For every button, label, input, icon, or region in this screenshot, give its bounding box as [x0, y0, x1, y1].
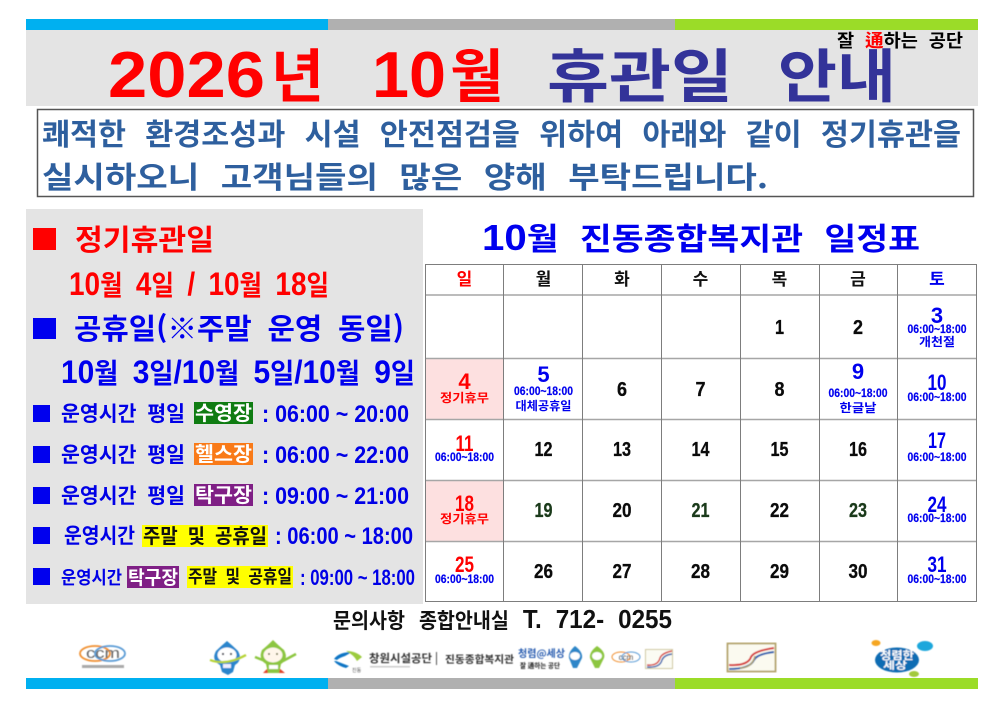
logo strip: combined organisation logos: 창원시설공단 [369, 650, 432, 666]
week 3: 11 [456, 431, 474, 456]
week 4: 23 [849, 500, 867, 522]
hours: table tennis weekends: 탁구장 [128, 563, 178, 590]
hours: fitness centre: 헬스장 [195, 438, 252, 467]
week 3 [435, 428, 967, 464]
hours: fitness centre: 운영시간 평일 [61, 439, 185, 469]
week 2: 7 [696, 379, 706, 401]
week 2: 06:00~18:00 [828, 386, 888, 400]
title: 10 [372, 38, 446, 111]
week 2: 10 [928, 370, 946, 395]
week 1: 06:00~18:00 [908, 322, 967, 336]
week 4: 24 [928, 492, 947, 517]
week 5 [435, 552, 967, 586]
notice box: 실시하오니 고객님들의 많은 양해 부탁드립니다. [42, 153, 768, 197]
public holiday dates: 10월 3일/10월 5일/10월 9일 [61, 354, 415, 390]
week 2: 06:00~18:00 [514, 384, 573, 398]
week 1: 개천절 [919, 333, 955, 350]
week 4: 정기휴무 [440, 510, 489, 527]
week 2: 06:00~18:00 [908, 390, 967, 404]
week 3: 17 [928, 428, 946, 453]
icon: green mascot [255, 640, 296, 673]
logo strip: combined organisation logos: 청렴@세상 [518, 645, 565, 660]
weekday headers: 수 [693, 265, 708, 290]
week 2: 4 [458, 369, 471, 394]
hours: swimming pool: 운영시간 평일 [61, 398, 185, 428]
hours: swimming pool [33, 397, 409, 428]
week 3: 14 [692, 439, 710, 461]
public holiday heading: 공휴일(※주말 운영 동일) [74, 306, 404, 348]
weekday headers: 월 [536, 265, 551, 290]
logo strip: combined organisation logos [334, 645, 672, 674]
week 2: 6 [617, 379, 627, 401]
weekday headers: 토 [929, 265, 945, 290]
weekday headers: 화 [614, 265, 630, 290]
week 5: 28 [691, 561, 710, 583]
week 2: 8 [774, 379, 784, 401]
logo strip: combined organisation logos: ccm [619, 653, 634, 662]
calendar table [425, 264, 977, 602]
week 5: 26 [534, 561, 553, 583]
logo: clean world blob: 세상 [883, 657, 907, 672]
week 4: 19 [534, 500, 552, 522]
logo strip: combined organisation logos: 진동종합복지관 [445, 651, 514, 666]
week 5: 25 [455, 552, 474, 577]
regular closure heading: 정기휴관일 [75, 217, 214, 259]
hours: table tennis: 운영시간 평일 [61, 480, 185, 510]
regular closure dates: 10월 4일 / 10월 18일 [69, 266, 329, 302]
title: 월 [450, 30, 504, 114]
hours: table tennis weekends: 주말 및 공휴일 [188, 563, 292, 589]
week 5: 06:00~18:00 [908, 572, 967, 586]
week 3: 15 [770, 439, 788, 461]
hours: table tennis: 탁구장 [195, 479, 252, 508]
week 1 [775, 303, 967, 350]
logo strip: combined organisation logos: 잘 通하는 공단 [520, 661, 561, 671]
emblem: certification mark [728, 644, 776, 672]
hours: table tennis: : 09:00 ~ 21:00 [262, 483, 409, 510]
week 3: 06:00~18:00 [908, 450, 967, 464]
weekday headers [457, 265, 945, 290]
week 4: 18 [455, 491, 474, 516]
hours: table tennis weekends: : 09:00 ~ 18:00 [300, 565, 415, 590]
week 4 [440, 491, 967, 527]
weekday headers: 일 [457, 265, 472, 290]
top colour bar [26, 19, 978, 30]
panel: closure and operating hours [26, 209, 423, 604]
logo strip: combined organisation logos: 진동 [352, 667, 362, 674]
week 5: 27 [612, 561, 632, 583]
hours: fitness centre [33, 438, 409, 469]
title [108, 30, 896, 114]
week 4: 06:00~18:00 [908, 511, 967, 525]
weekday headers: 목 [772, 265, 787, 290]
week 1: 2 [853, 317, 863, 339]
notice box [38, 110, 974, 197]
week 3: 06:00~18:00 [435, 450, 494, 464]
title: 2026 [108, 38, 265, 111]
week 5: 06:00~18:00 [435, 572, 494, 586]
slogan: 잘 通하는 공단 [837, 27, 963, 53]
bottom colour bar [26, 678, 978, 689]
week 2: 한글날 [840, 399, 876, 416]
title band [26, 30, 978, 114]
hours: weekends and holidays: : 06:00 ~ 18:00 [275, 523, 413, 550]
week 4: 20 [612, 500, 632, 522]
week 2: 9 [852, 359, 864, 384]
logo: CCM: ccm [86, 645, 120, 662]
hours: swimming pool: : 06:00 ~ 20:00 [262, 401, 409, 428]
week 5: 31 [928, 552, 946, 577]
week 3: 13 [613, 439, 631, 461]
week 1: 1 [775, 317, 784, 339]
week 4: 22 [770, 500, 789, 522]
hours: weekends and holidays [33, 520, 413, 550]
hours: table tennis [33, 479, 409, 510]
week 2: 정기휴무 [440, 389, 489, 406]
week 3: 16 [849, 439, 867, 461]
week 3: 12 [534, 439, 552, 461]
hours: weekends and holidays: 주말 및 공휴일 [143, 520, 267, 549]
icon: blue mascot [210, 641, 246, 675]
week 4: 21 [692, 500, 710, 522]
week 5: 29 [770, 561, 789, 583]
title: 안내 [778, 30, 896, 114]
week 2: 대체공휴일 [516, 397, 572, 414]
hours: fitness centre: : 06:00 ~ 22:00 [262, 442, 409, 469]
contact line: 문의사항 종합안내실 T. 712- 0255 [333, 604, 672, 634]
week 2 [440, 359, 967, 416]
title: 휴관일 [547, 30, 733, 114]
title: 년 [271, 30, 324, 114]
week 5: 30 [848, 561, 868, 583]
hours: table tennis weekends [33, 563, 415, 590]
hours: swimming pool: 수영장 [195, 397, 252, 426]
hours: table tennis weekends: 운영시간 [61, 564, 122, 590]
weekday headers: 금 [850, 265, 866, 290]
calendar heading: 10월 진동종합복지관 일정표 [482, 217, 920, 258]
logo: clean world blob: 청렴한 [880, 647, 914, 663]
hours: weekends and holidays: 운영시간 [64, 520, 135, 550]
notice box: 쾌적한 환경조성과 시설 안전점검을 위하여 아래와 같이 정기휴관을 [42, 110, 961, 154]
week 1: 3 [931, 303, 943, 328]
logo: CCM [80, 645, 125, 668]
week 2: 5 [537, 362, 550, 387]
logo: clean world blob [872, 640, 933, 677]
